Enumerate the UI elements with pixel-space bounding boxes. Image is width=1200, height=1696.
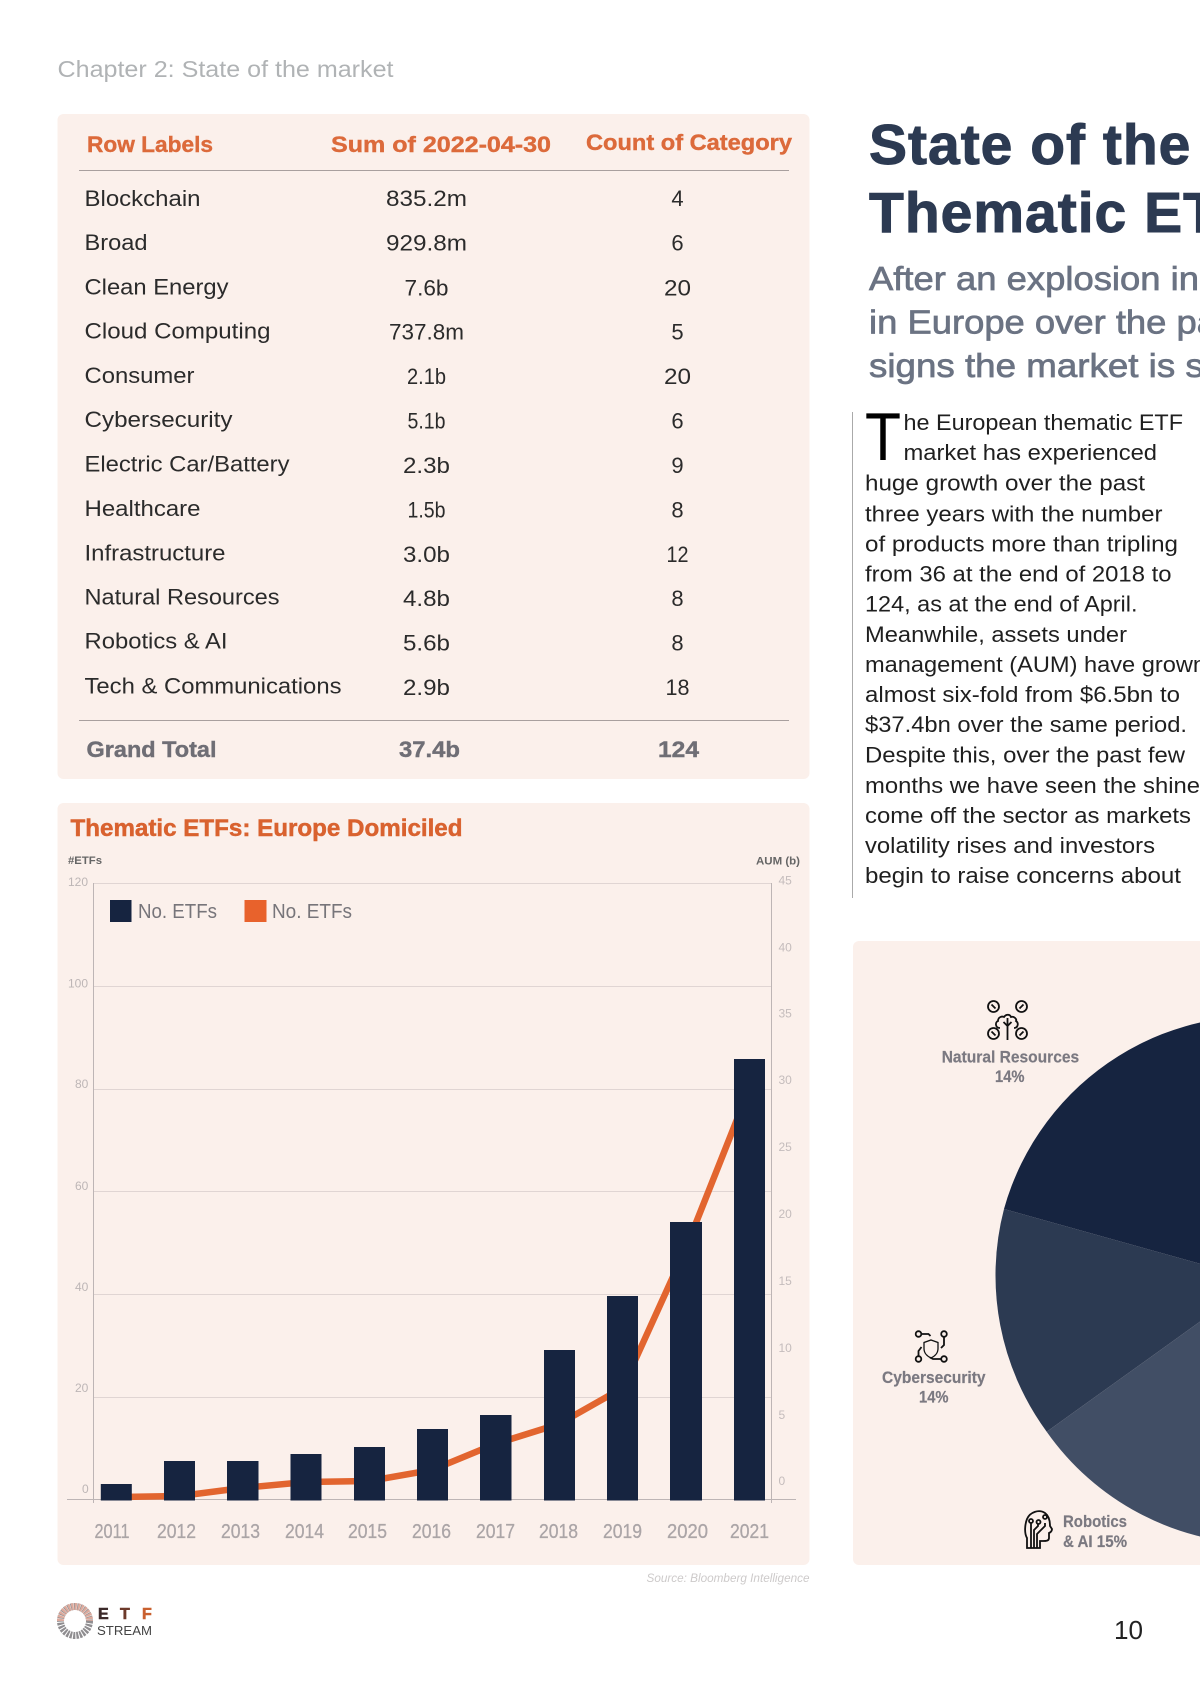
x axis year labels: 2014 xyxy=(285,1521,324,1543)
row: Natural Resources: 8 xyxy=(671,586,684,611)
paragraph lines: of products more than tripling xyxy=(865,532,1178,556)
row: Healthcare: 1.5b xyxy=(408,497,446,522)
row: Healthcare: Healthcare xyxy=(84,496,200,521)
pie slices xyxy=(995,1016,1200,1544)
label: Natural Resources: 14% xyxy=(995,1068,1025,1086)
table header row: Row Labels xyxy=(87,132,213,157)
row: Blockchain: 4 xyxy=(671,186,684,211)
left axis labels: 120 xyxy=(68,875,88,889)
row: Clean Energy xyxy=(84,274,691,300)
paragraph lines xyxy=(865,410,1200,888)
x axis year labels: 2018 xyxy=(539,1521,578,1543)
row: Electric Car/Battery xyxy=(84,452,684,478)
row: Consumer: Consumer xyxy=(84,363,194,388)
paragraph lines: almost six-fold from $6.5bn to xyxy=(865,682,1180,707)
paragraph lines: management (AUM) have grown xyxy=(865,652,1200,677)
row: Cybersecurity xyxy=(84,407,684,434)
x axis year labels: 2017 xyxy=(476,1521,515,1543)
row: Grand Total xyxy=(86,737,700,762)
row: Blockchain: 835.2m xyxy=(386,186,467,211)
right axis labels: 30 xyxy=(778,1073,792,1087)
row: Tech & Communications xyxy=(84,674,690,700)
chapter heading: Chapter 2: State of the market xyxy=(58,56,394,82)
row: Robotics & AI: 8 xyxy=(671,631,684,656)
logo: ETF Stream: F xyxy=(142,1606,152,1623)
row: Cloud Computing: 5 xyxy=(671,320,684,345)
row: Natural Resources xyxy=(84,585,684,611)
paragraph lines: he European thematic ETF xyxy=(904,410,1183,435)
logo: ETF Stream: STREAM xyxy=(97,1623,152,1638)
row: Broad: 929.8m xyxy=(386,230,467,255)
x axis year labels: 2016 xyxy=(412,1521,451,1543)
paragraph lines: come off the sector as markets xyxy=(865,803,1191,828)
subtitle: signs the market is st xyxy=(869,347,1200,384)
chart title: Thematic ETFs: Europe Domiciled xyxy=(70,815,462,842)
right axis labels: 40 xyxy=(778,940,792,954)
row: Blockchain: Blockchain xyxy=(84,186,200,211)
row: Broad: Broad xyxy=(84,230,148,255)
row: Consumer: 2.1b xyxy=(407,364,446,389)
panel: combo chart xyxy=(58,803,810,1565)
page number: 10 xyxy=(1114,1615,1143,1645)
row: Electric Car/Battery: Electric Car/Battery xyxy=(84,452,290,476)
left axis title: #ETFs xyxy=(68,855,102,867)
table header row: Count of Category xyxy=(586,130,793,155)
left axis labels: 100 xyxy=(68,976,88,990)
right axis labels: 20 xyxy=(778,1207,792,1221)
icon: head with circuits xyxy=(1025,1511,1052,1548)
row: Natural Resources: 4.8b xyxy=(403,586,450,611)
row: Grand Total: 37.4b xyxy=(399,737,460,762)
legend: No. ETFs xyxy=(138,901,217,923)
row: Robotics & AI xyxy=(84,629,684,656)
row: Robotics & AI: Robotics & AI xyxy=(84,629,228,654)
row: Broad: 6 xyxy=(671,230,684,255)
label: Cybersecurity: Cybersecurity xyxy=(882,1369,986,1387)
row: Healthcare xyxy=(84,496,684,522)
logo: ETF Stream: T xyxy=(120,1606,130,1623)
row: Blockchain xyxy=(84,186,684,211)
paragraph lines: Meanwhile, assets under xyxy=(865,622,1127,647)
legend: No. ETFs xyxy=(272,901,352,923)
logo: ETF Stream: E xyxy=(98,1606,109,1623)
right axis labels: 5 xyxy=(778,1408,786,1422)
paragraph lines: volatility rises and investors xyxy=(865,833,1155,858)
row: Clean Energy: 7.6b xyxy=(404,275,448,300)
subtitle xyxy=(869,260,1200,384)
x axis year labels: 2015 xyxy=(348,1521,387,1543)
row: Cybersecurity: Cybersecurity xyxy=(84,407,232,432)
row: Broad xyxy=(84,230,684,255)
row: Infrastructure: 3.0b xyxy=(403,542,450,567)
subtitle: in Europe over the pa xyxy=(869,304,1200,340)
label: Natural Resources: Natural Resources xyxy=(942,1048,1079,1066)
row: Tech & Communications: 18 xyxy=(666,675,690,700)
row: Healthcare: 8 xyxy=(671,497,684,522)
x axis year labels: 2013 xyxy=(221,1521,260,1543)
paragraph lines: huge growth over the past xyxy=(865,470,1145,495)
x axis year labels: 2011 xyxy=(94,1521,130,1543)
row: Clean Energy: 20 xyxy=(664,275,691,300)
x axis year labels xyxy=(94,1521,769,1543)
paragraph lines: market has experienced xyxy=(904,440,1157,465)
row: Cloud Computing: Cloud Computing xyxy=(84,318,270,343)
subtitle: After an explosion in xyxy=(869,260,1199,297)
right axis title: AUM (b) xyxy=(756,856,800,868)
icon: tree with leaves xyxy=(988,1001,1027,1040)
left axis labels: 80 xyxy=(75,1077,89,1091)
row: Cloud Computing: 737.8m xyxy=(389,320,464,345)
label: Robotics & AI xyxy=(1025,1511,1127,1551)
left axis labels: 60 xyxy=(75,1179,89,1193)
label: Robotics & AI: & AI 15% xyxy=(1063,1533,1127,1551)
row: Cloud Computing xyxy=(84,318,684,345)
x axis year labels: 2019 xyxy=(603,1521,642,1543)
row: Robotics & AI: 5.6b xyxy=(403,631,450,656)
row: Consumer: 20 xyxy=(664,364,691,389)
left axis labels xyxy=(68,875,89,1496)
table header row: Sum of 2022-04-30 xyxy=(331,132,551,157)
row: Natural Resources: Natural Resources xyxy=(84,585,280,610)
row: Grand Total: 124 xyxy=(658,737,700,762)
right axis labels xyxy=(778,874,792,1488)
right axis labels: 35 xyxy=(778,1006,792,1020)
right axis labels: 25 xyxy=(778,1140,792,1154)
x axis year labels: 2020 xyxy=(667,1521,708,1543)
paragraph lines: 124, as at the end of April. xyxy=(865,592,1138,616)
label: Natural Resources xyxy=(942,1001,1079,1086)
article body text xyxy=(852,399,1200,898)
table header row xyxy=(87,130,793,157)
left axis labels: 40 xyxy=(75,1280,89,1294)
legend xyxy=(110,900,352,923)
label: Cybersecurity xyxy=(882,1331,986,1406)
row: Cybersecurity: 6 xyxy=(671,408,684,434)
row: Infrastructure xyxy=(84,540,688,567)
main title xyxy=(869,113,1200,245)
row: Tech & Communications: Tech & Communications xyxy=(84,674,342,698)
source note: Source: Bloomberg Intelligence xyxy=(646,1571,810,1585)
row: Infrastructure: 12 xyxy=(666,542,688,567)
row: Electric Car/Battery: 2.3b xyxy=(403,453,450,478)
bar series: number of ETFs xyxy=(101,1059,765,1500)
label: Cybersecurity: 14% xyxy=(919,1388,949,1406)
row: Grand Total: Grand Total xyxy=(86,737,216,762)
paragraph lines: Despite this, over the past few xyxy=(865,742,1185,768)
drop cap: T xyxy=(865,399,901,475)
left axis labels: 0 xyxy=(82,1482,89,1496)
paragraph lines: $37.4bn over the same period. xyxy=(865,712,1187,737)
paragraph lines: from 36 at the end of 2018 to xyxy=(865,562,1172,586)
right axis labels: 10 xyxy=(778,1341,792,1355)
line series: AUM xyxy=(116,1088,750,1497)
paragraph lines: months we have seen the shine xyxy=(865,773,1200,798)
label: Robotics & AI: Robotics xyxy=(1063,1513,1127,1531)
left axis labels: 20 xyxy=(75,1381,89,1395)
row: Tech & Communications: 2.9b xyxy=(403,675,450,700)
paragraph lines: three years with the number xyxy=(865,502,1162,526)
main title: State of the xyxy=(869,113,1191,177)
x axis year labels: 2021 xyxy=(730,1521,769,1543)
row: Clean Energy: Clean Energy xyxy=(84,274,228,299)
icon: shield with circuit nodes xyxy=(916,1331,947,1362)
paragraph lines: begin to raise concerns about xyxy=(865,863,1181,888)
row: Consumer xyxy=(84,363,691,389)
right axis labels: 0 xyxy=(778,1474,786,1488)
panel: pie chart xyxy=(853,941,1200,1565)
row: Electric Car/Battery: 9 xyxy=(671,453,684,478)
logo: ETF Stream xyxy=(60,1606,152,1638)
x axis year labels: 2012 xyxy=(157,1521,196,1543)
row: Cybersecurity: 5.1b xyxy=(408,408,446,434)
right axis labels: 15 xyxy=(778,1274,792,1288)
right axis labels: 45 xyxy=(778,874,792,888)
panel: data table xyxy=(58,114,810,779)
row: Infrastructure: Infrastructure xyxy=(84,540,226,566)
